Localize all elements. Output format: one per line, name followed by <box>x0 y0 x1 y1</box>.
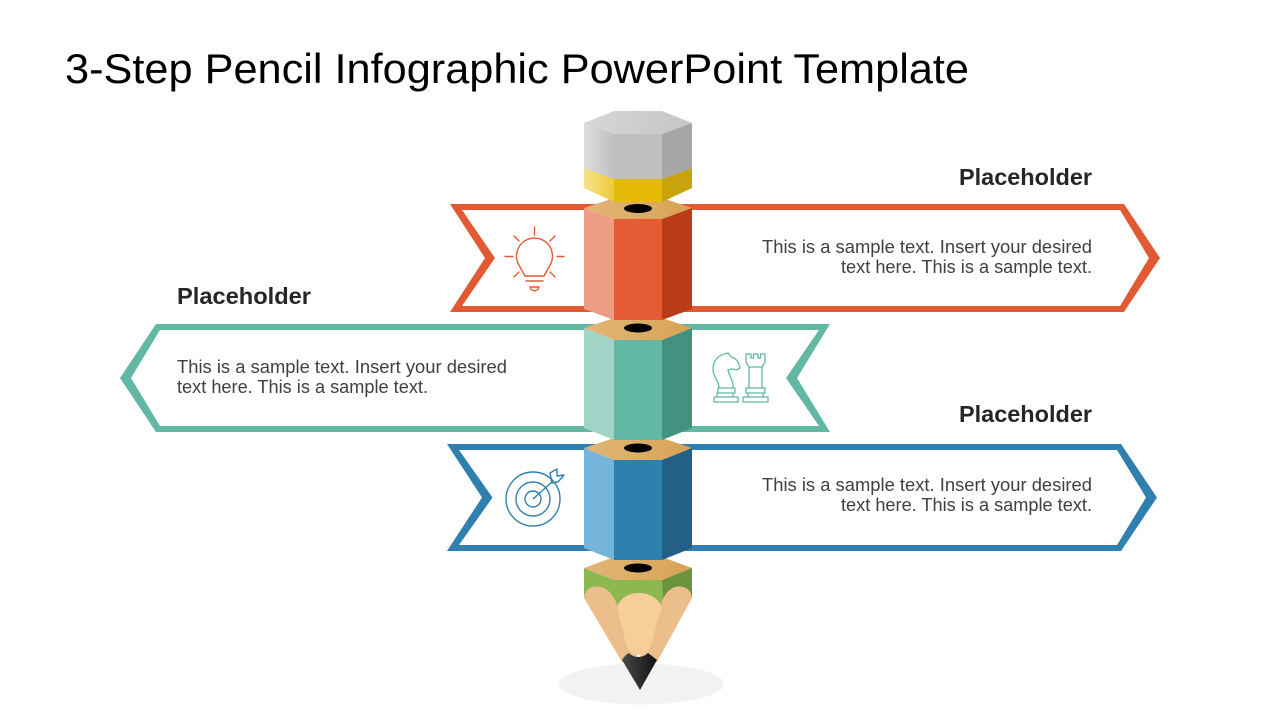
step 2 text <box>177 357 507 397</box>
step 1 text: This is a sample text. Insert your desired <box>762 237 1092 257</box>
arrow banner: blue step <box>447 444 1157 551</box>
step 1 text <box>762 237 1092 277</box>
step 3 text: text here. This is a sample text. <box>841 495 1092 515</box>
pencil segment: teal <box>584 318 692 440</box>
eraser ferrule <box>584 168 692 202</box>
step 1 text: text here. This is a sample text. <box>841 257 1092 277</box>
arrow banner: teal step <box>120 324 830 432</box>
step 1 heading: Placeholder <box>959 164 1092 190</box>
pencil shadow <box>559 664 724 704</box>
step 3 heading: Placeholder <box>959 401 1092 427</box>
pencil segment: blue <box>584 438 692 560</box>
step 3 text <box>762 475 1092 515</box>
pencil <box>584 111 692 690</box>
step 2 text: text here. This is a sample text. <box>177 377 428 397</box>
step 2 heading: Placeholder <box>177 283 311 309</box>
title: 3-Step Pencil Infographic PowerPoint Template <box>65 45 969 92</box>
step 3 text: This is a sample text. Insert your desired <box>762 475 1092 495</box>
arrow banner: red step <box>450 204 1160 312</box>
icon: light bulb <box>505 227 564 291</box>
pencil tip <box>584 557 692 690</box>
icon: target with arrow <box>506 469 564 526</box>
icon: chess pieces <box>713 353 768 402</box>
eraser <box>584 111 692 179</box>
pencil segment: red <box>584 198 692 320</box>
step 2 text: This is a sample text. Insert your desired <box>177 357 507 377</box>
